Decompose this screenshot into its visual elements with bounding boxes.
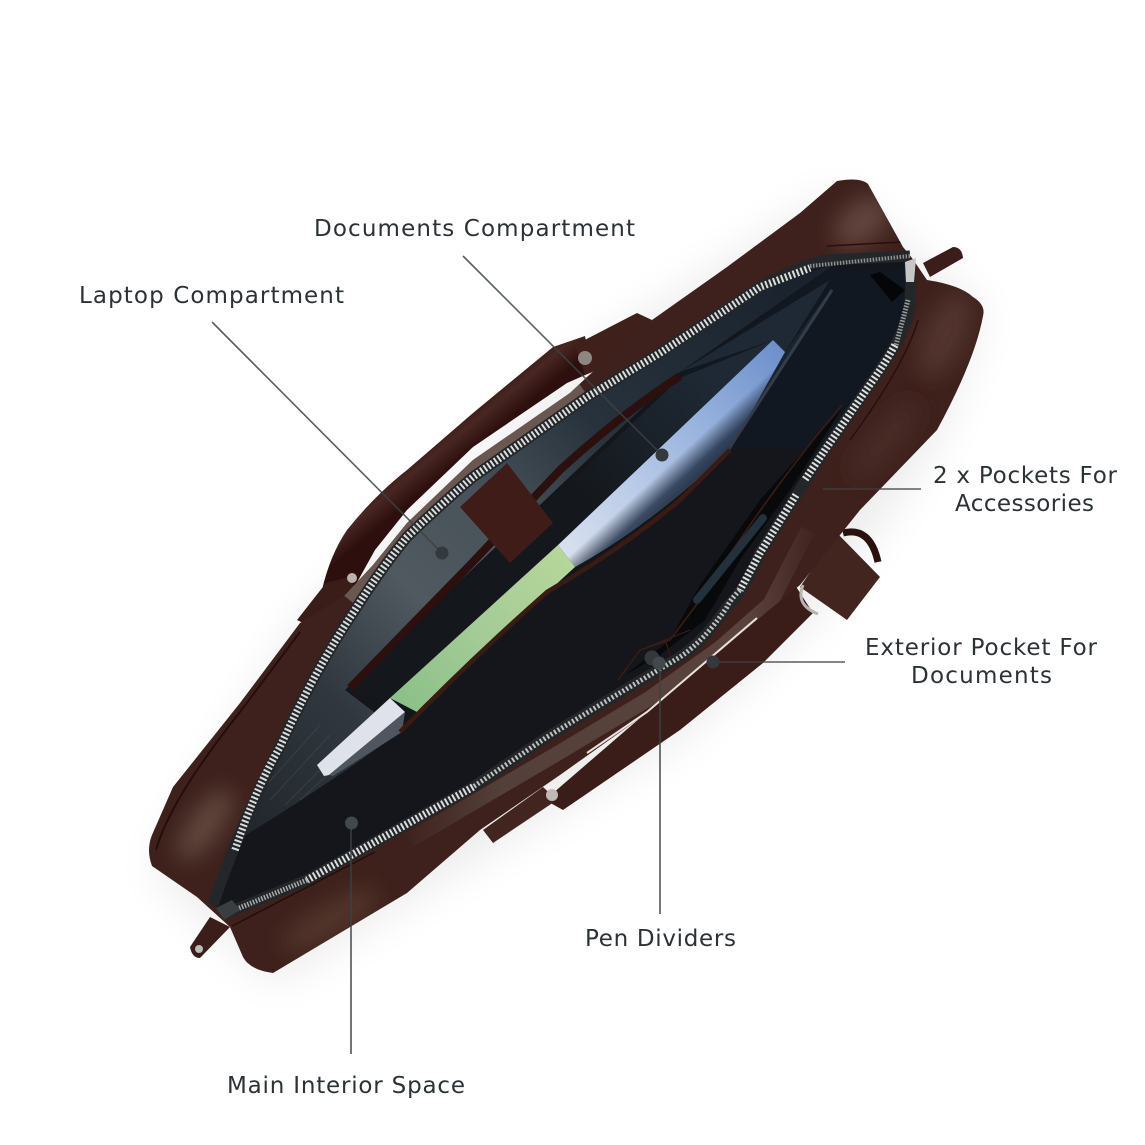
label: Exterior Pocket For bbox=[865, 635, 1098, 661]
callout: Exterior Pocket For Documents bbox=[706, 635, 1098, 689]
marker dot bbox=[436, 546, 448, 560]
label: Pen Dividers bbox=[585, 926, 736, 952]
laptop compartment lining bbox=[241, 264, 835, 838]
label bbox=[865, 635, 1098, 689]
laptop strap tab bbox=[460, 463, 553, 563]
navy panel beside book bbox=[730, 288, 832, 447]
zip pull: lower left bbox=[190, 917, 230, 958]
top carry handle bbox=[322, 336, 592, 595]
label: Documents bbox=[911, 663, 1052, 689]
strap tab: top handle right bbox=[575, 313, 652, 375]
label: Main Interior Space bbox=[227, 1073, 465, 1099]
zipper: upper run bbox=[213, 256, 910, 905]
leader line bbox=[212, 322, 442, 553]
pen bbox=[697, 518, 763, 600]
right document divider edge bbox=[730, 290, 832, 447]
document divider brown trim bbox=[400, 450, 730, 732]
book grey edge bbox=[329, 712, 405, 776]
callout: Documents Compartment bbox=[314, 216, 668, 462]
strap tab: top handle left bbox=[297, 573, 357, 632]
leader line bbox=[823, 488, 921, 490]
documents book bbox=[317, 340, 785, 776]
document pocket dark panel bbox=[350, 340, 773, 700]
label: Laptop Compartment bbox=[79, 283, 344, 309]
zip slider lower left bbox=[216, 900, 240, 920]
front carry handle bbox=[545, 585, 813, 810]
strap tab: front handle left bbox=[483, 787, 558, 843]
book shaded lower section bbox=[403, 565, 575, 732]
callout: 2 x Pockets For Accessories bbox=[823, 463, 1118, 517]
soft bag shadow bbox=[150, 190, 985, 985]
callout: Main Interior Space bbox=[227, 816, 465, 1099]
zip slider upper right bbox=[905, 258, 916, 282]
laptop divider brown trim bbox=[350, 376, 680, 688]
callout: Laptop Compartment bbox=[79, 283, 448, 560]
navy back panel bbox=[680, 280, 830, 372]
bag bbox=[149, 180, 984, 973]
accessories pocket bbox=[618, 405, 843, 680]
label: Documents Compartment bbox=[314, 216, 635, 242]
marker dot bbox=[706, 656, 720, 668]
leader line bbox=[350, 823, 352, 1054]
marker dot bbox=[656, 448, 668, 462]
label: Accessories bbox=[955, 491, 1094, 517]
book green section bbox=[390, 545, 575, 712]
marker dot bbox=[652, 656, 666, 670]
label bbox=[933, 463, 1118, 517]
leather body bbox=[149, 180, 984, 973]
book white corner bbox=[317, 698, 405, 776]
zipper: lower run bbox=[227, 262, 911, 913]
zip pull: upper right bbox=[923, 247, 963, 277]
back wall of document compartment bbox=[680, 262, 910, 450]
lining stripes bbox=[262, 725, 355, 805]
strap tab: front handle right bbox=[800, 532, 880, 620]
zip end dark gusset bbox=[870, 272, 905, 302]
pen top dot bbox=[644, 650, 660, 666]
leader line bbox=[713, 661, 845, 663]
main interior bbox=[213, 256, 911, 913]
marker dot bbox=[345, 816, 358, 830]
leader line bbox=[659, 663, 661, 914]
label: 2 x Pockets For bbox=[933, 463, 1118, 489]
leader line bbox=[463, 256, 662, 455]
callout: Pen Dividers bbox=[585, 656, 736, 952]
